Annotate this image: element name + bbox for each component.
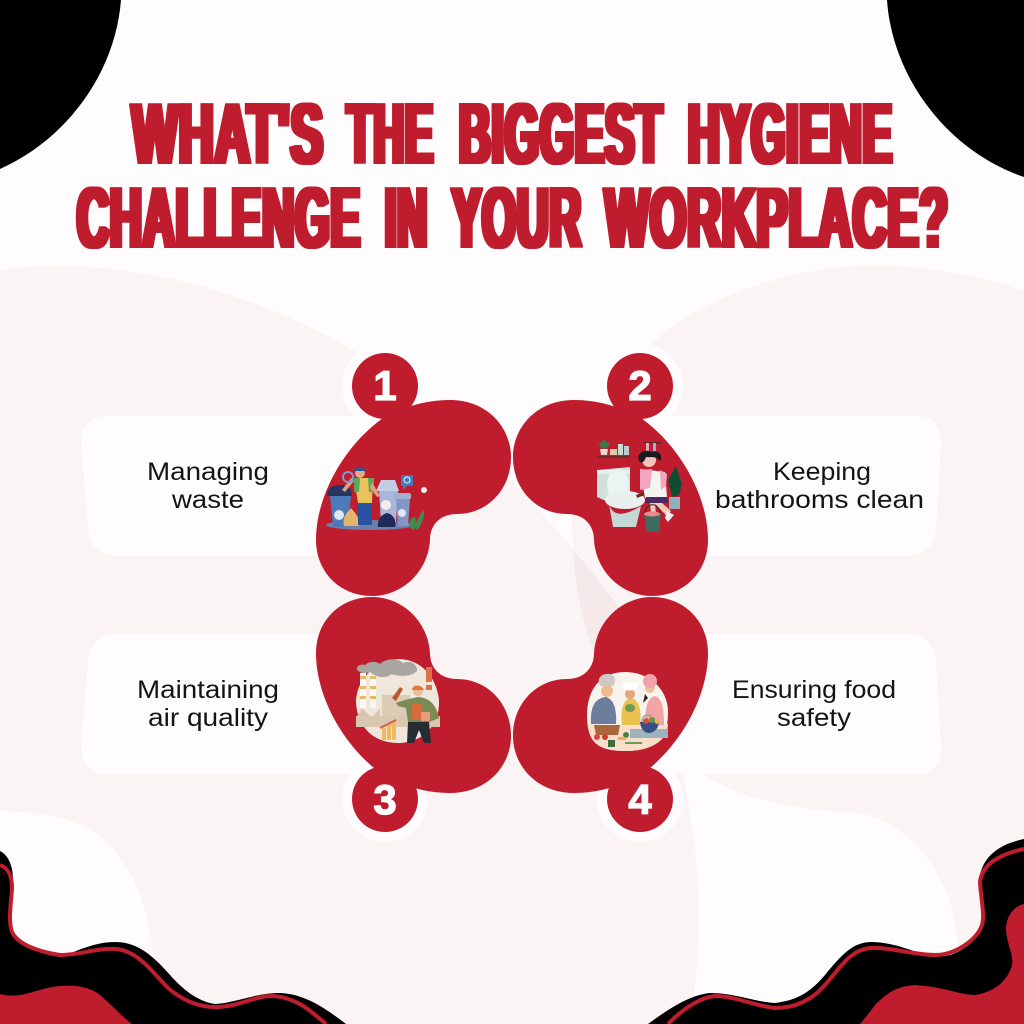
title: YOUR	[452, 171, 582, 266]
card 2 text: Keeping	[773, 458, 871, 486]
number badge 3: 3	[373, 776, 397, 823]
card 4 text: safety	[777, 704, 852, 732]
card 2 text: bathrooms clean	[715, 486, 924, 514]
card 4 text: Ensuring food	[732, 676, 896, 704]
number badge 4: 4	[628, 776, 652, 823]
card 4 text	[732, 676, 896, 732]
card 1 text: Managing	[147, 458, 269, 486]
card 1: managing waste	[81, 416, 400, 556]
bottom-right red fill wave	[860, 904, 1024, 1024]
badge halo 3	[342, 756, 428, 842]
badge halo 1	[342, 343, 428, 429]
red blob 4	[513, 597, 708, 793]
icon: food safety kitchen illustration	[587, 672, 668, 751]
icon: cleaning the toilet illustration	[597, 439, 682, 532]
title: THE	[347, 87, 434, 182]
number badge 4	[607, 766, 673, 832]
red blob 2	[513, 400, 708, 596]
top-right corner shape	[887, 0, 1024, 177]
bottom-left red line	[0, 865, 326, 1024]
card 2 text	[715, 458, 924, 514]
card 3: maintaining air quality	[81, 634, 400, 774]
number badge 1: 1	[373, 362, 397, 409]
bottom-right black wave	[648, 839, 1024, 1024]
title	[77, 87, 949, 266]
title: WHAT'S	[132, 87, 324, 182]
red blob 3	[316, 597, 511, 793]
title: BIGGEST	[459, 87, 663, 182]
card 1 text: waste	[171, 486, 244, 514]
badge halo 4	[597, 756, 683, 842]
number badge 3	[352, 766, 418, 832]
card 3 text	[137, 676, 279, 732]
number badge 2	[607, 353, 673, 419]
number badge 1	[352, 353, 418, 419]
background shape: left lobe	[0, 266, 699, 1024]
bottom-right red line	[668, 849, 1024, 1024]
title: IN	[385, 171, 428, 266]
bottom-left black wave	[0, 851, 346, 1024]
bottom-left red fill wave	[0, 986, 132, 1024]
red blob 1	[316, 400, 511, 596]
card 2: keeping bathrooms clean	[624, 416, 941, 556]
icon: waste sorting illustration	[326, 467, 427, 530]
card 3 text: air quality	[148, 704, 269, 732]
card 1 text	[147, 458, 269, 514]
background shape: right lobe	[572, 266, 1024, 1024]
card 3 text: Maintaining	[137, 676, 279, 704]
background shape: overlap wedge	[573, 550, 619, 652]
number badge 2: 2	[628, 362, 652, 409]
title: CHALLENGE	[77, 171, 361, 266]
top-left corner shape	[0, 0, 121, 169]
badge halo 2	[597, 343, 683, 429]
card 4: ensuring food safety	[624, 634, 941, 774]
icon: air quality factory illustration	[356, 659, 440, 743]
